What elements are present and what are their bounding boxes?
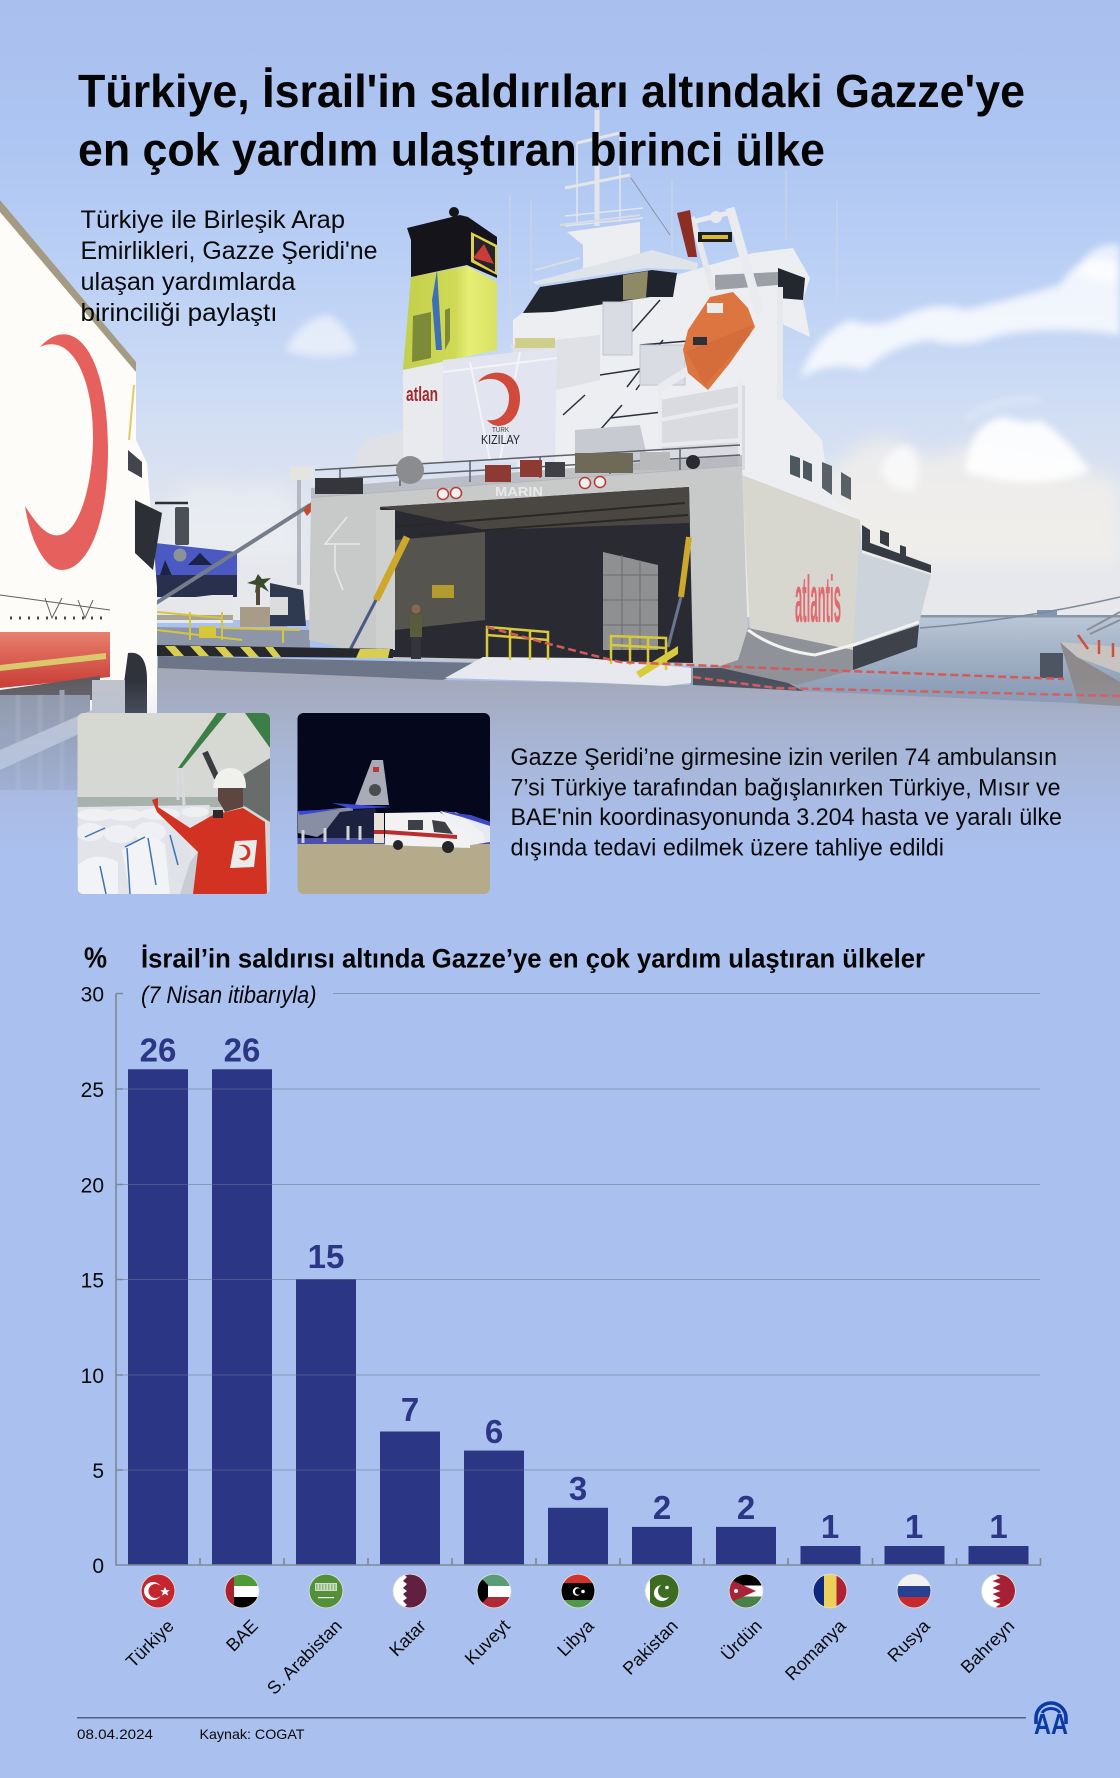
country labels: BAE <box>222 1616 262 1655</box>
value labels: 3 <box>569 1470 587 1507</box>
y axis labels: 30 <box>81 984 104 1006</box>
inset photo: Red Crescent worker and aid sacks <box>76 713 270 894</box>
country labels: Katar <box>385 1616 430 1660</box>
funnel <box>403 207 497 370</box>
country labels: Bahreyn <box>957 1616 1018 1677</box>
subtitle text block: ulaşan yardımlarda <box>80 268 296 296</box>
y axis labels: 20 <box>81 1174 104 1198</box>
ship stern and hull <box>309 445 931 692</box>
subtitle text block <box>80 206 378 327</box>
bars <box>128 1069 1028 1565</box>
AA logo: AA <box>1034 1709 1068 1741</box>
ambulance paragraph: dışında tedavi edilmek üzere tahliye edildi <box>510 834 944 862</box>
value labels: 2 <box>653 1489 671 1526</box>
subtitle text block: birinciliği paylaştı <box>80 299 278 327</box>
flag: Ürdün <box>729 1574 763 1608</box>
ship hull upper: banner and white deck wall: TÜRK <box>492 426 509 434</box>
red crescent on trailer <box>25 334 108 570</box>
bar chart <box>81 984 1040 1698</box>
ship hull upper: banner and white deck wall <box>350 348 557 470</box>
chart heading <box>84 942 925 1009</box>
value labels: 2 <box>737 1489 755 1526</box>
ship stern and hull: atlantis <box>795 562 841 636</box>
flag: Katar <box>393 1574 427 1608</box>
y axis labels: 10 <box>81 1365 104 1388</box>
value labels: 1 <box>905 1508 923 1545</box>
inset photo: cargo plane and ambulances at night <box>298 713 490 894</box>
ship mast <box>510 110 837 320</box>
footer rule <box>77 1717 1026 1718</box>
man standing at ramp <box>410 604 422 659</box>
footer date and source: 08.04.2024 <box>77 1726 153 1742</box>
ambulance paragraph: BAE'nin koordinasyonunda 3.204 hasta ve yaralı ülke <box>510 804 1062 831</box>
country labels <box>122 1615 1018 1698</box>
fade from photo to page background <box>0 680 1120 860</box>
country labels: Ürdün <box>717 1616 766 1664</box>
flag: Rusya <box>897 1574 931 1608</box>
y axis labels: 0 <box>92 1555 104 1578</box>
value labels: 26 <box>140 1032 176 1068</box>
country labels: Rusya <box>884 1615 935 1666</box>
value labels: 7 <box>401 1391 419 1428</box>
main photo: ship at the port <box>0 0 1120 860</box>
country labels: S. Arabistan <box>263 1616 346 1698</box>
y axis labels: 25 <box>81 1079 104 1102</box>
chart heading: % <box>84 942 107 974</box>
chart heading: İsrail’in saldırısı altında Gazze’ye en çok yardım ulaştıran ülkeler <box>141 944 925 974</box>
ship superstructure <box>510 215 860 520</box>
ship hull upper: banner and white deck wall: atlan <box>406 384 438 406</box>
y axis labels: 5 <box>92 1460 104 1483</box>
country labels: Türkiye <box>122 1616 178 1672</box>
subtitle text block: Emirlikleri, Gazze Şeridi'ne <box>80 237 378 265</box>
value labels <box>140 1032 1008 1545</box>
title <box>78 65 1025 176</box>
country labels: Pakistan <box>619 1616 682 1679</box>
footer date and source: Kaynak: COGAT <box>200 1726 305 1742</box>
y axis labels <box>81 984 104 1578</box>
subtitle text block: Türkiye ile Birleşik Arap <box>80 206 345 234</box>
value labels: 6 <box>485 1413 503 1450</box>
flag: Romanya <box>813 1574 848 1608</box>
title: Türkiye, İsrail'in saldırıları altındaki Gazze'ye <box>78 65 1025 117</box>
value labels: 15 <box>308 1238 344 1275</box>
flag: S. Arabistan <box>309 1574 343 1608</box>
value labels: 1 <box>821 1508 839 1545</box>
lifeboat and davit <box>660 208 780 465</box>
chart heading: (7 Nisan itibarıyla) <box>141 982 316 1009</box>
truck with red crescent <box>0 200 189 790</box>
flag: Türkiye <box>141 1574 175 1608</box>
port background: building, trucks, palm, light pole <box>153 467 315 656</box>
country labels: Libya <box>553 1615 599 1660</box>
value labels: 26 <box>224 1032 260 1068</box>
flag: Bahreyn <box>981 1574 1016 1608</box>
water, horizon, distant ship <box>690 597 1120 707</box>
flag: Pakistan <box>645 1574 679 1608</box>
title: en çok yardım ulaştıran birinci ülke <box>78 124 825 176</box>
flag: Libya <box>561 1574 595 1608</box>
country labels: Kuveyt <box>461 1616 514 1669</box>
footer date and source <box>77 1726 305 1742</box>
ambulance paragraph: Gazze Şeridi’ne girmesine izin verilen 74 ambulansın <box>510 744 1057 771</box>
flag: BAE <box>225 1574 259 1608</box>
country labels: Romanya <box>781 1615 851 1684</box>
flag: Kuveyt <box>477 1574 511 1608</box>
stern ramp opening <box>350 487 693 663</box>
value labels: 1 <box>989 1508 1008 1545</box>
ambulance paragraph: 7’si Türkiye tarafından bağışlanırken Türkiye, Mısır ve <box>510 774 1060 802</box>
sky with clouds <box>0 0 1120 620</box>
ship hull upper: banner and white deck wall: KIZILAY <box>481 432 520 447</box>
MARIN label on stern: MARIN <box>495 484 543 499</box>
ground and quay <box>0 612 1120 860</box>
y axis labels: 15 <box>81 1270 104 1292</box>
ambulance paragraph <box>510 744 1062 862</box>
